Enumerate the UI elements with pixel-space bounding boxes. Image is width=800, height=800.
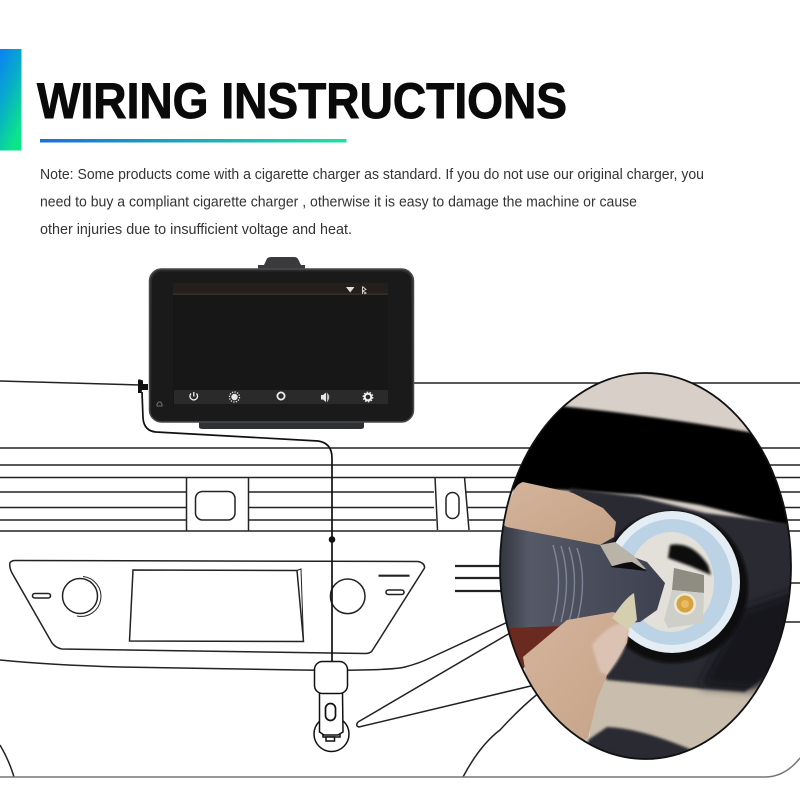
title underline	[40, 139, 346, 142]
chrome ring outer	[604, 511, 740, 653]
status bar	[173, 283, 388, 295]
plug body	[500, 523, 665, 628]
textured dark panel	[560, 488, 800, 692]
note text: other injuries due to insufficient voltage and heat.	[40, 221, 352, 238]
plug ribs	[553, 545, 582, 622]
icon: bluetooth	[362, 286, 366, 294]
monitor base	[199, 422, 364, 429]
lower left red background	[508, 626, 560, 668]
fingertip pale pad	[592, 622, 629, 675]
icon: settings gear	[363, 392, 373, 402]
socket circle	[314, 716, 349, 752]
chrome ring blue	[612, 519, 732, 645]
cable connector	[138, 379, 148, 393]
monitor body	[150, 269, 414, 422]
dashboard line drawing	[0, 381, 800, 777]
monitor screen	[173, 283, 388, 404]
title: WIRING INSTRUCTIONS	[37, 73, 567, 129]
socket metal contact	[672, 568, 704, 593]
fingernail	[612, 593, 637, 630]
socket shadow	[598, 511, 748, 663]
black dash band	[512, 404, 787, 526]
inset outline	[500, 373, 791, 759]
note text: Note: Some products come with a cigarette charger as standard. If you do not use our original charger, you	[40, 166, 704, 183]
monitor mount top	[258, 257, 305, 269]
circular inset photo: plug inserted in socket	[490, 365, 800, 770]
bottom border line	[0, 758, 800, 777]
icon: brightness	[230, 392, 240, 402]
charger tip	[323, 732, 340, 737]
top finger	[500, 482, 616, 545]
small mic mark	[157, 402, 162, 406]
lower beige surface	[590, 678, 759, 749]
icon: volume	[321, 392, 329, 402]
note text	[40, 166, 704, 238]
note text: need to buy a compliant cigarette charger , otherwise it is easy to damage the machine or cause	[40, 194, 637, 210]
photo background beige	[510, 374, 769, 742]
bottom dark patch	[586, 725, 692, 758]
bottom finger	[523, 612, 630, 750]
icon: wifi	[346, 287, 354, 292]
charger head	[314, 662, 348, 694]
cable clip	[329, 536, 335, 543]
plug metal clip	[600, 542, 646, 569]
gradient accent block	[0, 49, 22, 150]
power cable	[138, 379, 335, 662]
bottom menu bar	[174, 390, 388, 404]
charger body	[320, 693, 343, 735]
gold pin	[674, 593, 696, 615]
icon: power	[190, 392, 198, 400]
icon: camera ring	[277, 392, 285, 400]
socket dark recess	[668, 544, 711, 575]
socket interior	[628, 532, 714, 632]
dark panel lower shadow	[700, 590, 800, 690]
cigarette charger plug	[314, 662, 349, 752]
car monitor	[150, 257, 414, 429]
socket lower pale metal	[664, 590, 704, 628]
